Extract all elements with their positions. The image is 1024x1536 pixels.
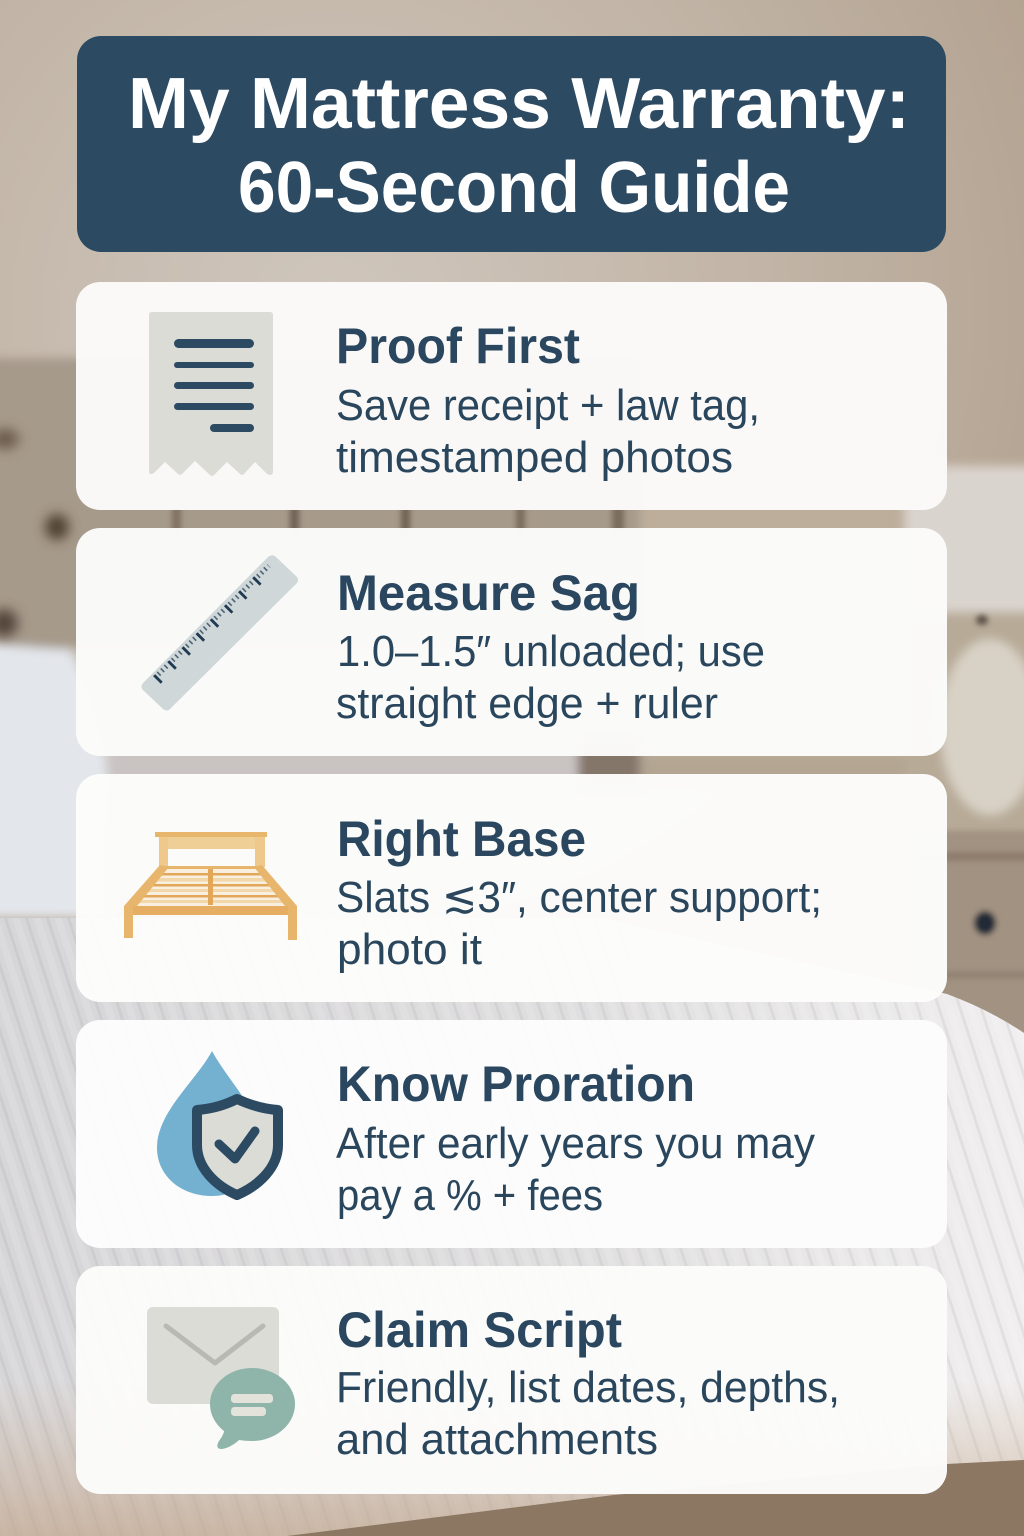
heading: claim script: Claim Script	[337, 1302, 622, 1358]
body: know proration	[336, 1119, 815, 1220]
panel: proof first	[76, 282, 947, 510]
body: measure sag	[336, 627, 765, 728]
icon: receipt	[149, 312, 273, 476]
panel: measure sag	[76, 528, 947, 756]
icon: bed frame	[124, 832, 297, 940]
body: right base: Slats ≲3″, center support;	[336, 873, 822, 922]
panel: right base	[76, 774, 947, 1002]
bedding	[0, 918, 1024, 1536]
title line 2: 60-Second Guide	[238, 148, 790, 228]
heading: right base: Right Base	[337, 811, 586, 867]
icon: water drop with shield	[157, 1051, 278, 1196]
body: proof first: Save receipt + law tag,	[336, 381, 760, 430]
body: know proration: pay a % + fees	[337, 1171, 603, 1220]
headboard tufts	[0, 429, 69, 637]
body: measure sag: straight edge + ruler	[336, 679, 718, 728]
body: proof first: timestamped photos	[336, 433, 733, 482]
icon: ruler	[142, 555, 298, 710]
heading: proof first: Proof First	[336, 318, 580, 374]
panel: know proration	[76, 1020, 947, 1248]
body: claim script: Friendly, list dates, depths,	[336, 1363, 840, 1412]
body: right base	[336, 873, 822, 974]
title banner	[77, 36, 946, 252]
body: measure sag: 1.0–1.5″ unloaded; use	[337, 627, 765, 676]
heading: measure sag: Measure Sag	[337, 565, 640, 621]
nightstand	[172, 505, 1024, 1046]
body: proof first	[336, 381, 760, 482]
body: know proration: After early years you may	[336, 1119, 815, 1168]
body: right base: photo it	[337, 925, 482, 974]
heading: know proration: Know Proration	[337, 1056, 695, 1112]
body: claim script	[336, 1363, 840, 1464]
panel: claim script	[76, 1266, 947, 1494]
title line 1: My Mattress Warranty:	[128, 64, 910, 144]
body: claim script: and attachments	[336, 1415, 658, 1464]
icon: envelope with chat bubble	[147, 1307, 295, 1449]
